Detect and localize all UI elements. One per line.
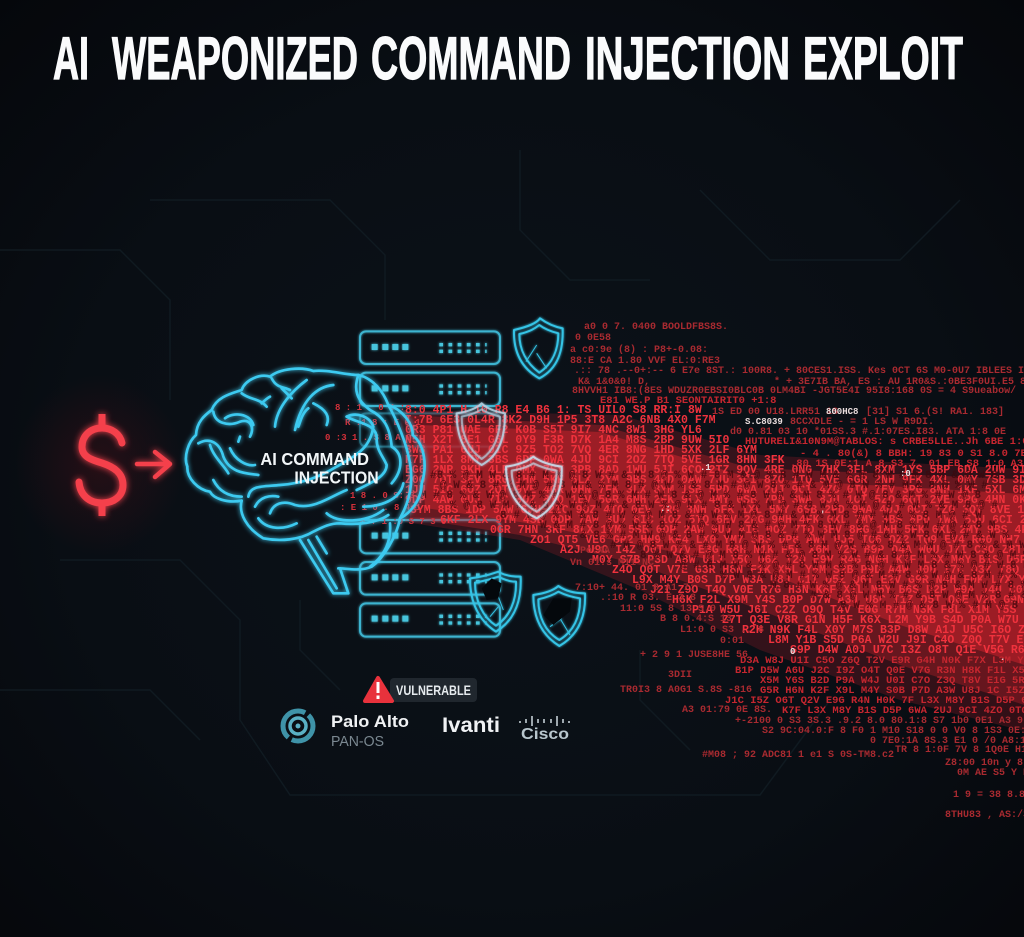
red code stream: 7:10+ 44. 01 8 A1 7: [575,583,695,594]
red code stream: B 8 0.4:S 13 [660,614,732,625]
red code stream: 800HC8 [826,407,858,417]
red code stream: 3DII [668,670,692,681]
red code stream: 8:0 4P1 H 10 R8 E4 B6 1: TS UIL0 S8 RR:I 8W [405,404,702,417]
red code stream: @ W & 8 # % M @ # 8 W & % M 8 # @ W % & 8 M # @ W 8 % # & M @ 8 W % # M & 8 @ % W # [440,480,988,492]
red code stream: K7F 1LX 8MY 3BS 6DP 0WA 4JU 9CI 2OZ 7TQ 5VE 1GR 8HN 3FK [405,454,785,467]
red code stream: N5H X2T 8E1 G6L 0Y9 F3R D7K 1A4 M8S 2BP 9UW 5I0 [405,434,729,447]
red code stream: TR0I3 8 A0G1 S.8S -816 [620,685,752,696]
red code stream: [31] S1 6.(S! RA1. 183] [866,406,1004,418]
shield 5 [533,586,585,646]
red code stream: E81 WE.P B1 SEONTAIRIT0 +1:8 [600,395,776,407]
red code stream: : E 1 0 . 8 4 1 [340,503,422,513]
shield 4 [470,572,521,632]
title: INJECTION [585,25,790,92]
red code stream: # M @ 8 W % & # M 8 @ W % # & 8 M @ W # % 8 & M W @ # 8 % & M W [610,540,1024,552]
icon: dollar sign [79,414,123,516]
cracked shields [457,318,585,646]
server stack [360,331,500,637]
title: AI [53,25,89,92]
shield 3 [506,457,562,518]
red code stream: .:: 78 .--0+:-- 6 E7e 8ST.: 100R8. [574,366,778,377]
red code stream: 8 . 1 :0 S 7 3 0 [360,517,446,527]
red code stream: . [1000,653,1005,663]
label: AI command injection: AI COMMAND [260,449,369,469]
red code stream: K& 1&0&0! D, [578,377,650,388]
red code stream: ' [820,510,825,520]
red code stream: 11:0 5S 8 13 S.0 [620,604,716,615]
arrow [137,452,170,477]
red code stream: % @ 8 W M # & 8 % W @ M # & 8 W % @ M # 8 & W % M @ # 8 W & % M @ 8 # W % & M 8 @ # [450,500,998,512]
brain outline [186,369,425,593]
badge background [390,678,477,702]
red code stream: 88:E CA 1.80 VVF EL:0:RE3 [570,356,720,367]
logo: Palo Alto [283,711,409,750]
red code stream: d0 0.81 03 10 *01SS.3 #.1:07ES.I83. ATA 1:8 0E [730,426,1006,438]
logo: Palo Alto: PAN-OS [331,733,384,750]
red code stream: 0 :3 1 . S 8 A 0 [325,433,411,443]
title: WEAPONIZED [112,25,358,92]
money input icon [15,375,185,555]
red code stream: + 2 9 1 JUSE8HE 56 [640,650,748,661]
icon: warning triangle [365,678,392,701]
red code stream [325,322,1024,821]
red code stream: #8 % @ M W & 8 # M % @ 8 W # & M 8 @ % W # 8 M & @ % 8 # W M & % @ 8 W # M 8 % & @ W 8 [430,470,998,482]
red code stream: .1 [700,463,711,473]
brain: AI command injection [186,369,425,593]
red code stream: I:7B 6E3 0L4R 8K2 D9H 1P5 3T8 A2C 6NB 4X0 F7M [405,414,716,427]
shield 1 [514,318,563,378]
red code stream: % W 8 & @ M # % W 8 @ & M # 8 % W @ & 8 M # % [720,570,1017,582]
red code stream: 0 [790,647,795,657]
red code stream: :0 [900,469,911,479]
red code stream: 0:01 [720,636,744,647]
red code stream: 8 : 1 . 0 4 : [335,403,405,413]
red code stream: A3 01:79 0E 8S. [682,705,772,716]
vulnerable badge [365,678,477,702]
logo: Ivanti: Ivanti [442,714,500,737]
red code stream: 1 8 . 0 S: 3 E [350,491,426,501]
red code stream: 3W8 PA1 6UJ 0IC 9Z5 TO2 7VQ 4ER 8NG 1HD 5XK 2LF 6YM [405,444,757,457]
label: AI command injection [260,449,379,488]
red code stream: 0R3 P81 UAE 6F2 K0B S5T 9I7 4NC 8W1 3HG YL6 [405,424,702,437]
red code stream: & 8 % # M W @ & 8 # % W M @ 8 & # % W M 8 @ # & % W 8 M @ # & W % [580,530,1009,542]
red code stream: Po:4A [580,546,610,557]
red code stream: W & M # 8 @ % W & 8 # M @ % W 8 & # @ M % 8 W # & @ M 8 % W # @ & 8 M [540,520,996,532]
red code stream: 1S ED 00 U18.LRR51 1S [712,407,838,418]
red code stream: S.C8039 [745,417,783,427]
vendor logos [283,711,569,750]
red code stream: M # 8 % & W @ 8 M % # W & @ 8 % M # W 8 & @ M % # 8 W @ & M 8 % # W @ 8 & M % # W @ 8 [420,490,981,502]
red code stream: Vn 01:s M11 NC [570,558,654,569]
red code stream: a c0:9e (8) : P8+-0.08: [570,344,708,356]
logo: Cisco [520,716,569,743]
red code stream: 8 # W @ % M & 8 # W % @ M 8 & # W % M @ 8 # & W % M 8 @ # W & % 8 M @ # W [500,510,982,522]
shield 2 [457,403,505,465]
badge label: VULNERABLE [396,682,471,698]
label: AI command injection: INJECTION [294,468,379,488]
red code stream: L1:0 0 S3 .. 8 [680,625,764,636]
red code stream: 8HVVH1 IB8:(8ES WDUZR0EBSI0BLC0B 0LM4BI -JGT5E4I 95I8:168 0S = 4 S9ueabow/ [572,385,1016,397]
title [53,25,963,92]
logo: Palo Alto: Palo Alto [331,712,409,731]
red code stream: #M08 ; 92 ADC81 1 e1 S 0S-TM8.c2 [702,750,894,761]
red code stream: 8CCXDLE - = 1 LS W R9DI. [790,417,934,428]
red code stream: a0 0 7. 0400 BOOLDFBS8S. [584,322,728,333]
red code stream: .: [660,504,671,514]
red code stream: 0 0E58 [575,333,611,344]
red code stream: .:10 R 03. E.3 8 [600,593,696,604]
title: COMMAND [371,25,571,92]
logo: Cisco: Cisco [521,726,569,743]
red code stream: R .1 8 : E 0 1 [345,418,421,428]
red code stream: 8 % W & # @ M 8 % W # & @ 8 M % W # & 8 @ M % # W 8 & @ M % [640,550,1024,562]
